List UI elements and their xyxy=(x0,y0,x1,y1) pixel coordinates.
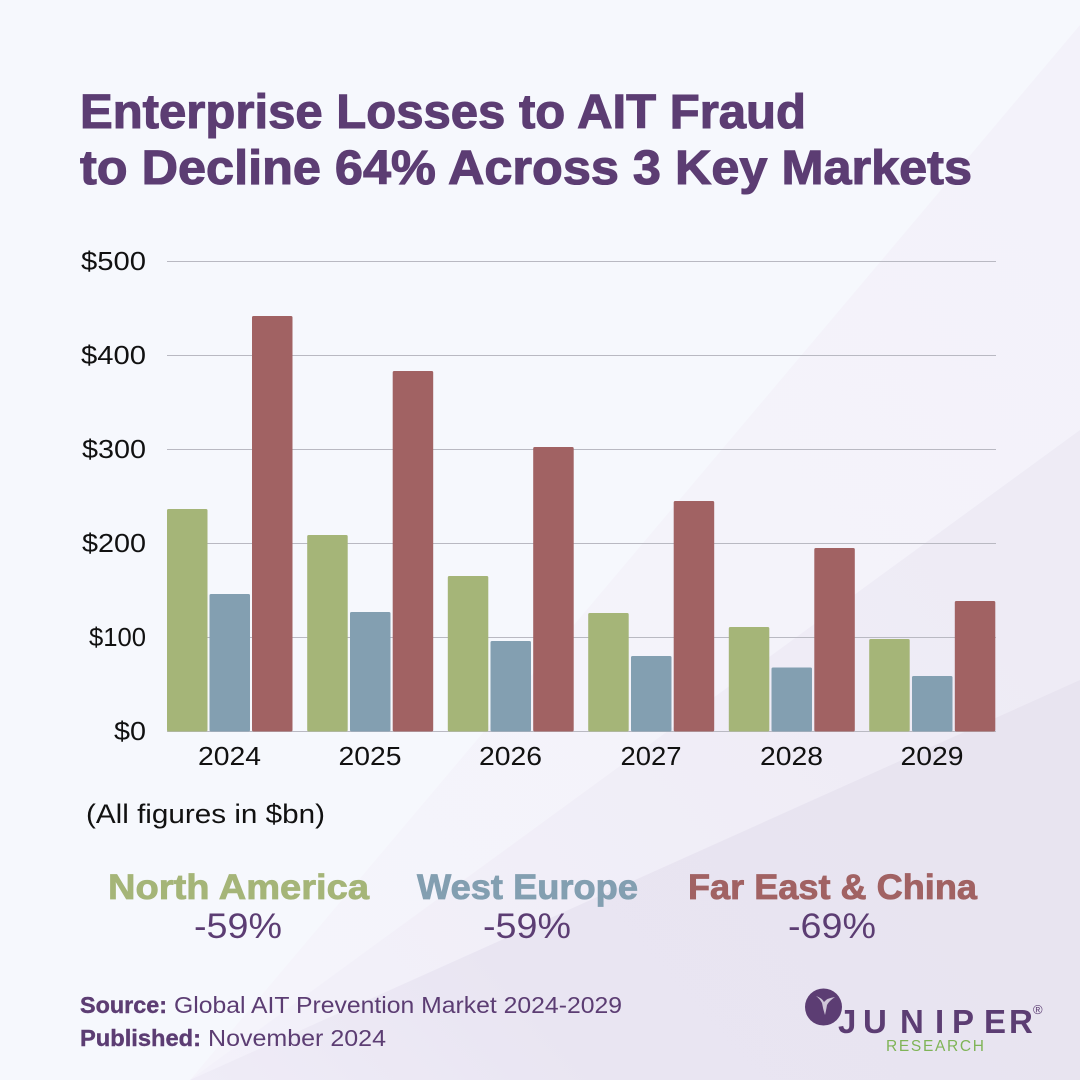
logo: Juniper Research: JUNIPER xyxy=(838,1003,1033,1040)
y axis labels: $300 xyxy=(82,434,146,464)
x axis labels: 2028 xyxy=(760,741,823,771)
bar chart xyxy=(81,246,996,771)
logo: Juniper Research: ® xyxy=(1033,1002,1043,1017)
x axis labels: 2026 xyxy=(479,741,542,771)
series: West Europe bars xyxy=(210,594,952,732)
legend: West Europe xyxy=(417,868,638,946)
unit note: (All figures in $bn) xyxy=(86,799,325,829)
logo: Juniper Research: RESEARCH xyxy=(886,1038,984,1055)
legend: West Europe: West Europe xyxy=(417,868,638,907)
legend: North America xyxy=(108,868,370,946)
published line: Published: xyxy=(80,1025,201,1051)
series: Far East & China bars xyxy=(252,316,995,732)
y axis labels: $200 xyxy=(82,528,146,558)
legend: Far East & China xyxy=(688,868,978,946)
legend: Far East & China: Far East & China xyxy=(688,868,978,907)
y axis labels: $500 xyxy=(81,246,146,276)
legend: West Europe: -59% xyxy=(483,907,571,946)
y axis labels: $400 xyxy=(81,340,146,370)
legend: North America: -59% xyxy=(194,907,282,946)
title: Enterprise Losses to AIT Fraud xyxy=(80,86,806,139)
x axis labels: 2029 xyxy=(900,741,964,771)
y axis labels: $100 xyxy=(89,622,146,652)
published line xyxy=(80,1025,386,1051)
x axis labels: 2024 xyxy=(198,741,261,771)
source line: Source: xyxy=(80,992,167,1018)
x axis labels: 2025 xyxy=(338,741,402,771)
logo: Juniper Research xyxy=(805,988,1043,1055)
source line: Global AIT Prevention Market 2024-2029 xyxy=(174,992,622,1018)
title xyxy=(80,86,972,195)
y axis labels xyxy=(81,246,146,746)
y axis labels: $0 xyxy=(114,716,146,746)
published line: November 2024 xyxy=(208,1025,386,1051)
legend: Far East & China: -69% xyxy=(788,907,876,946)
legend: North America: North America xyxy=(108,868,370,907)
title: to Decline 64% Across 3 Key Markets xyxy=(80,142,972,195)
series: North America bars xyxy=(167,509,910,732)
x axis labels xyxy=(198,741,964,771)
x axis labels: 2027 xyxy=(620,741,682,771)
